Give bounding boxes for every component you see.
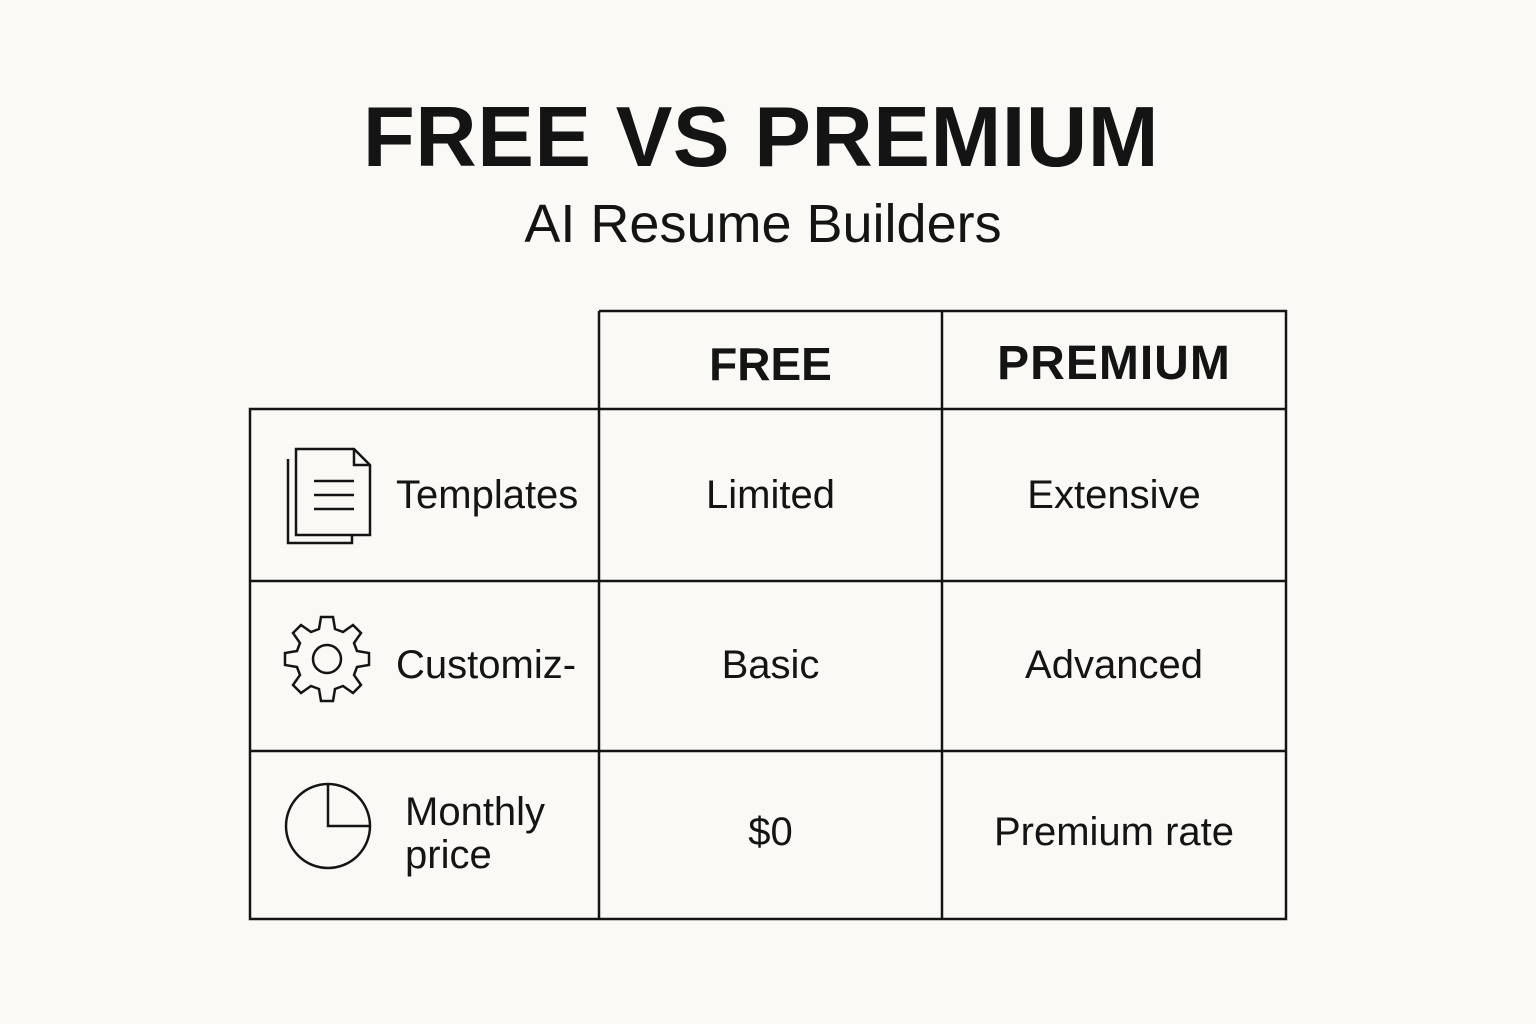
premium: Advanced: Advanced: [1025, 643, 1203, 687]
label: Monthly price: Monthly: [405, 790, 545, 834]
free: $0: $0: [748, 810, 793, 854]
header: FREE: FREE: [709, 338, 832, 390]
label: Customiz-: Customiz-: [396, 643, 576, 687]
free: Limited: Limited: [706, 473, 835, 517]
row: monthly price: [284, 782, 1234, 877]
premium: Premium rate: Premium rate: [994, 810, 1234, 854]
icon: document: [286, 448, 372, 544]
icon: pie clock: [284, 782, 372, 870]
title: FREE VS PREMIUM: [363, 90, 1159, 185]
subtitle: AI Resume Builders: [524, 194, 1002, 254]
row: templates: [286, 448, 1201, 544]
free: Basic: Basic: [722, 643, 819, 687]
icon: gear: [284, 616, 370, 702]
label: Monthly price: price: [405, 833, 492, 877]
row: customization: [284, 616, 1203, 702]
header: PREMIUM: PREMIUM: [997, 337, 1231, 390]
premium: Extensive: Extensive: [1027, 473, 1201, 517]
label: Templates: Templates: [396, 473, 578, 517]
label: Monthly price: [405, 790, 545, 877]
